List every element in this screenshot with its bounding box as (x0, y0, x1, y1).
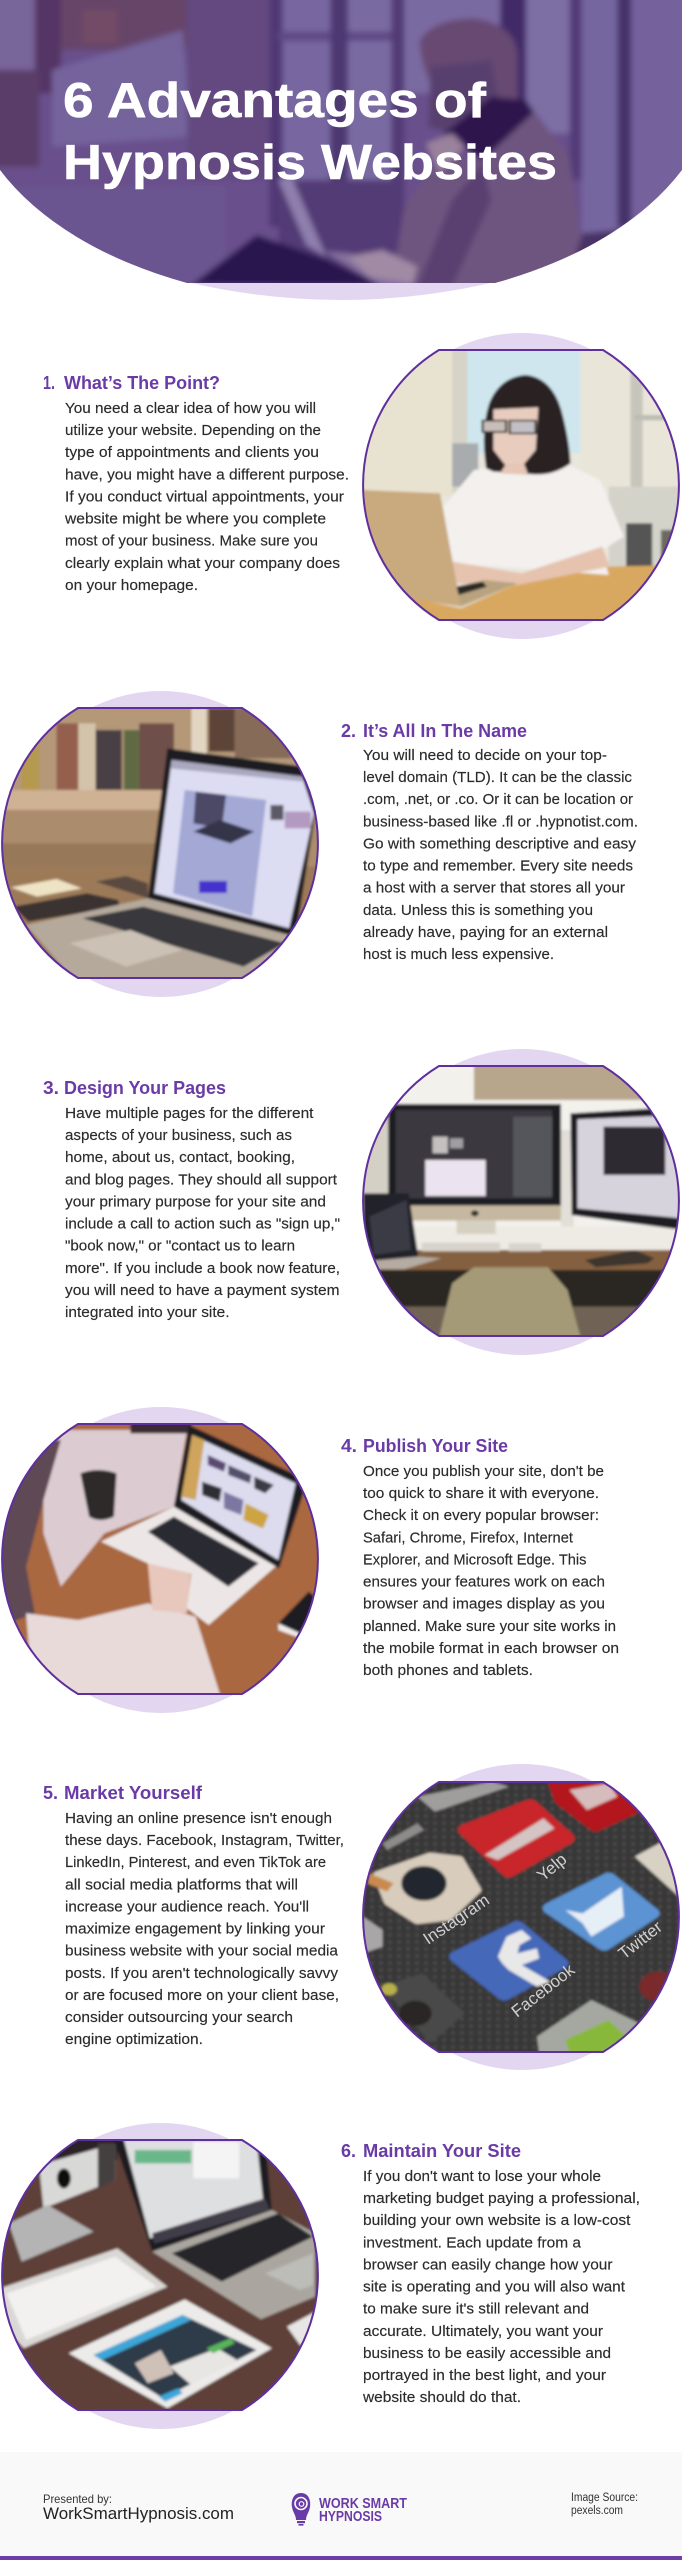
body text 1 (64, 401, 349, 594)
body text 1: You need a clear idea of how you will (65, 401, 316, 417)
body text 1: If you conduct virtual appointments, your (65, 490, 344, 506)
photo border 5 (363, 1782, 679, 2052)
body text 3: Have multiple pages for the different (65, 1106, 314, 1122)
body text 2: already have, paying for an external (363, 925, 608, 941)
heading 2: 2. (341, 721, 356, 741)
photo border 1 (363, 350, 679, 620)
panel: section 3 (43, 1049, 682, 1355)
heading 1: What’s The Point? (64, 373, 220, 393)
body text 5: all social media platforms that will (65, 1878, 298, 1894)
heading 4: 4. (341, 1436, 357, 1456)
heading 3: Design Your Pages (64, 1078, 226, 1098)
photo: laptop on desk with bookshelf (3, 709, 317, 977)
body text 6: browser can easily change how your (363, 2258, 613, 2274)
logo bulb icon (292, 2493, 310, 2526)
panel: section 2 (0, 691, 638, 997)
body text 5: Having an online presence isn't enough (65, 1811, 332, 1827)
body text 2: .com, .net, or .co. Or it can be location or (363, 792, 633, 808)
body text 1: most of your business. Make sure you (65, 534, 318, 550)
main title (63, 74, 557, 190)
body text 1: type of appointments and clients you (65, 445, 319, 461)
body text 5 (65, 1811, 344, 2048)
presented by: WorkSmartHypnosis.com (43, 2504, 234, 2523)
body text 4: ensures your features work on each (363, 1574, 605, 1590)
footer background (0, 2452, 682, 2556)
body text 5: LinkedIn, Pinterest, and even TikTok are (65, 1855, 326, 1871)
body text 6: to make sure it's still relevant and (363, 2302, 589, 2318)
lilac circle 4 (8, 1407, 314, 1713)
body text 4: too quick to share it with everyone. (363, 1486, 599, 1502)
body text 4: Once you publish your site, don't be (363, 1464, 604, 1480)
photo border 3 (363, 1066, 679, 1336)
heading 5: Market Yourself (64, 1783, 203, 1803)
app labels: Facebook (508, 1960, 579, 2021)
body text 6: site is operating and you will also want (363, 2280, 625, 2296)
presented by: Presented by: (43, 2492, 112, 2506)
body text 3: your primary purpose for your site and (65, 1194, 326, 1210)
body text 4 (363, 1464, 619, 1679)
app labels: Twitter (615, 1917, 666, 1963)
hero photo: man with laptop, purple tint (0, 0, 682, 300)
photo: iMac, laptop, keyboard and tablet on desk (3, 2141, 317, 2409)
body text 6: portrayed in the best light, and your (363, 2368, 606, 2384)
lilac circle 1 (369, 333, 675, 639)
body text 6: business to be easily accessible and (363, 2346, 611, 2362)
body text 6: accurate. Ultimately, you want your (363, 2324, 603, 2340)
body text 5: consider outsourcing your search (65, 2010, 293, 2026)
heading 2: It’s All In The Name (363, 721, 527, 741)
photo: two monitors on desk (364, 1067, 678, 1335)
hero lilac shadow (187, 282, 495, 300)
body text 4: browser and images display as you (363, 1596, 605, 1612)
presented by (43, 2492, 234, 2523)
body text 5: increase your audience reach. You'll (65, 1900, 309, 1916)
body text 3: you will need to have a payment system (65, 1283, 340, 1299)
panel: section 6 (0, 2123, 640, 2429)
body text 2: business-based like .fl or .hypnotist.com. (363, 814, 638, 830)
body text 3: home, about us, contact, booking, (65, 1150, 295, 1166)
body text 2 (363, 748, 638, 963)
app labels (420, 1850, 666, 2021)
main title: Hypnosis Websites (63, 136, 557, 190)
body text 5: posts. If you aren't technologically savvy (65, 1966, 339, 1982)
logo: Work Smart Hypnosis: HYPNOSIS (319, 2508, 382, 2525)
panel: section 5 (43, 1764, 682, 2070)
body text 1: on your homepage. (65, 578, 198, 594)
photo: woman typing on laptop, overhead (3, 1425, 317, 1693)
body text 3: more". If you include a book now feature, (65, 1261, 340, 1277)
heading 1: 1. (43, 373, 55, 393)
app labels: Yelp (533, 1850, 570, 1885)
body text 4: Explorer, and Microsoft Edge. This (363, 1552, 586, 1568)
body text 6 (362, 2169, 640, 2406)
heading 3: 3. (43, 1078, 59, 1098)
body text 1: have, you might have a different purpose. (65, 468, 349, 484)
hero banner (0, 0, 682, 300)
body text 3: and blog pages. They should all support (65, 1172, 337, 1188)
body text 4: Safari, Chrome, Firefox, Internet (363, 1530, 573, 1546)
body text 1: utilize your website. Depending on the (65, 423, 321, 439)
body text 6: marketing budget paying a professional, (363, 2191, 640, 2207)
lilac circle 3 (369, 1049, 675, 1355)
lilac circle 5 (369, 1764, 675, 2070)
lilac circle 2 (8, 691, 314, 997)
heading 6: 6. (341, 2141, 356, 2161)
app labels: Instagram (420, 1890, 493, 1948)
image source (571, 2492, 638, 2517)
bottom purple bar (0, 2556, 682, 2560)
main title: 6 Advantages of (63, 74, 487, 128)
heading 4: Publish Your Site (363, 1436, 508, 1456)
heading 6: Maintain Your Site (363, 2141, 521, 2161)
photo: social media app icons (364, 1783, 678, 2051)
body text 4: the mobile format in each browser on (363, 1641, 619, 1657)
body text 3 (65, 1106, 340, 1321)
body text 3: "book now," or "contact us to learn (65, 1238, 295, 1254)
body text 2: You will need to decide on your top- (363, 748, 607, 764)
photo border 2 (2, 708, 318, 978)
body text 4: both phones and tablets. (363, 1663, 533, 1679)
body text 4: planned. Make sure your site works in (363, 1619, 616, 1635)
body text 5: maximize engagement by linking your (65, 1922, 325, 1938)
body text 5: or are focused more on your client base, (65, 1988, 339, 2004)
body text 2: to type and remember. Every site needs (363, 858, 633, 874)
body text 2: a host with a server that stores all your (363, 880, 625, 896)
body text 1: website might be where you complete (64, 512, 326, 528)
body text 2: level domain (TLD). It can be the classic (363, 770, 632, 786)
footer (0, 2452, 682, 2560)
image source: Image Source: (571, 2492, 638, 2504)
body text 6: investment. Each update from a (363, 2236, 582, 2252)
body text 2: Go with something descriptive and easy (363, 836, 637, 852)
body text 3: integrated into your site. (65, 1305, 230, 1321)
body text 6: website should do that. (362, 2390, 521, 2406)
logo: Work Smart Hypnosis (292, 2493, 407, 2526)
body text 5: business website with your social media (65, 1944, 339, 1960)
image source: pexels.com (571, 2505, 623, 2517)
body text 3: include a call to action such as "sign up," (65, 1216, 340, 1232)
body text 6: building your own website is a low-cost (363, 2213, 630, 2229)
body text 5: these days. Facebook, Instagram, Twitter, (65, 1833, 344, 1849)
heading 5: 5. (43, 1783, 58, 1803)
body text 4: Check it on every popular browser: (363, 1508, 599, 1524)
panel: section 4 (0, 1407, 619, 1713)
body text 2: data. Unless this is something you (363, 903, 593, 919)
photo border 4 (2, 1424, 318, 1694)
photo: woman at laptop (364, 351, 678, 619)
body text 5: engine optimization. (65, 2032, 203, 2048)
body text 2: host is much less expensive. (363, 947, 554, 963)
logo: Work Smart Hypnosis: WORK SMART (319, 2495, 407, 2512)
body text 1: clearly explain what your company does (65, 556, 340, 572)
body text 6: If you don't want to lose your whole (363, 2169, 601, 2185)
lilac circle 6 (8, 2123, 314, 2429)
photo border 6 (2, 2140, 318, 2410)
panel: section 1 (43, 333, 682, 639)
body text 3: aspects of your business, such as (65, 1128, 292, 1144)
